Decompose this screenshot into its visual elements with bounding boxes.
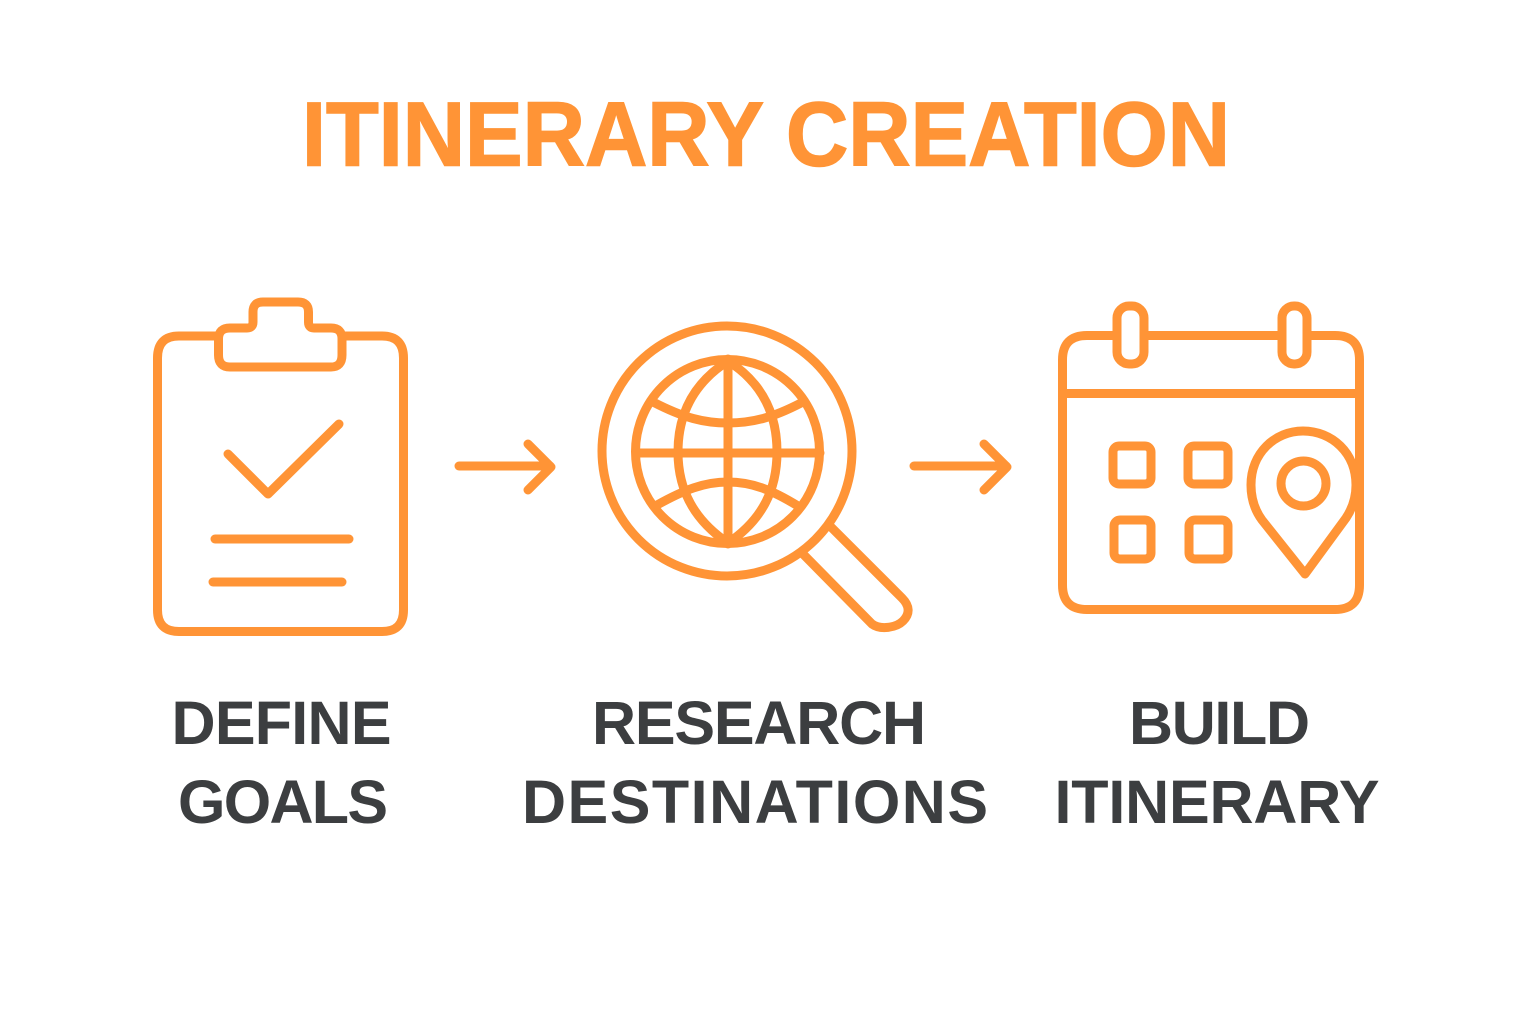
label: research destinations: DESTINATIONS xyxy=(522,768,988,836)
label: define goals: DEFINE xyxy=(172,689,392,757)
icon: calendar with location pin xyxy=(1062,306,1360,610)
label: define goals: GOALS xyxy=(178,768,388,836)
label: define goals xyxy=(172,689,392,836)
label: research destinations: RESEARCH xyxy=(592,689,926,757)
title: ITINERARY xyxy=(302,84,764,186)
label: build itinerary: BUILD xyxy=(1129,689,1310,757)
arrow: clipboard to globe xyxy=(459,444,551,490)
arrow: globe to calendar xyxy=(914,444,1007,490)
label: build itinerary xyxy=(1054,689,1380,836)
icon: clipboard xyxy=(158,302,404,632)
icon: magnifying glass with globe xyxy=(602,326,908,628)
title: CREATION xyxy=(786,84,1230,186)
title xyxy=(302,84,1230,186)
label: research destinations xyxy=(522,689,988,836)
label: build itinerary: ITINERARY xyxy=(1054,768,1380,836)
